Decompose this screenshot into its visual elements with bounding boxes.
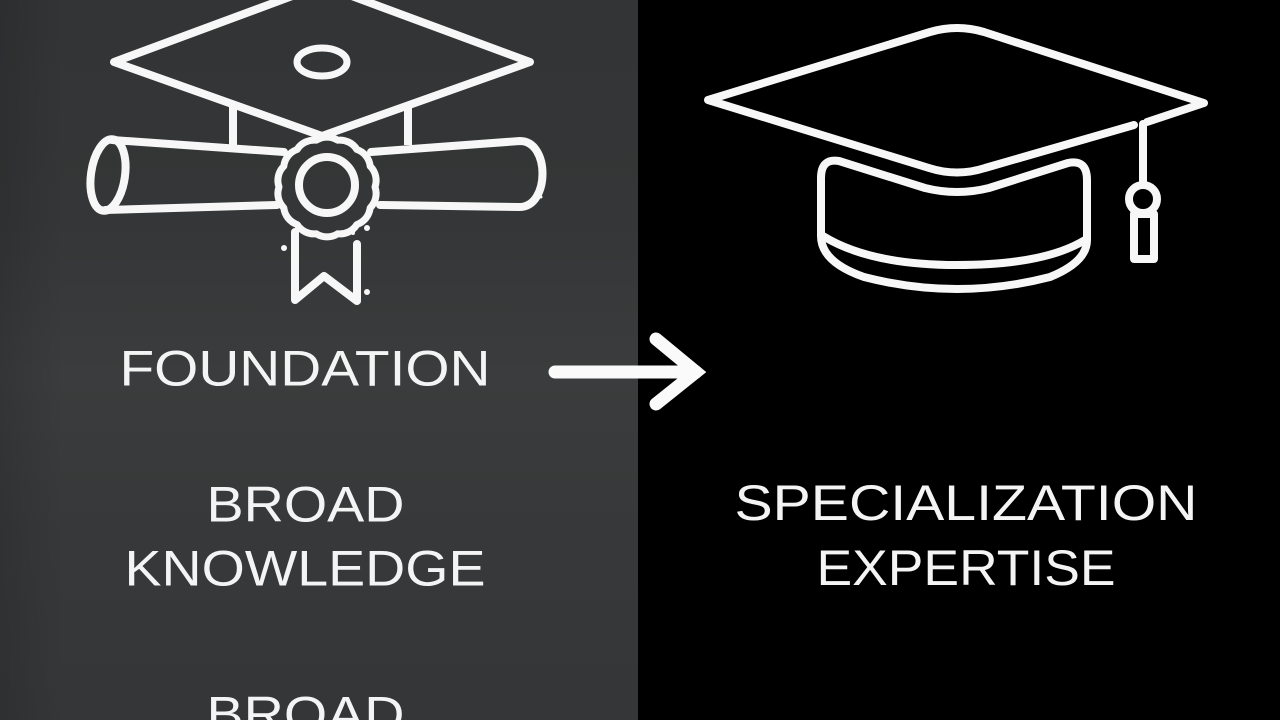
- text: specialization expertise: SPECIALIZATION: [734, 475, 1198, 531]
- heading: foundation: FOUNDATION: [120, 340, 490, 396]
- text: broad knowledge: KNOWLEDGE: [124, 540, 486, 596]
- icon: graduation cap with diploma: [86, 0, 542, 301]
- text: broad knowledge: [124, 476, 486, 596]
- panel: foundation background: [0, 0, 638, 720]
- arrow: [555, 339, 696, 404]
- text: specialization expertise: [734, 475, 1198, 596]
- panel: specialization background: [638, 0, 1280, 720]
- text: specialization expertise: EXPERTISE: [816, 540, 1116, 596]
- text: broad knowledge: BROAD: [206, 476, 404, 532]
- icon: graduation cap: [708, 28, 1204, 289]
